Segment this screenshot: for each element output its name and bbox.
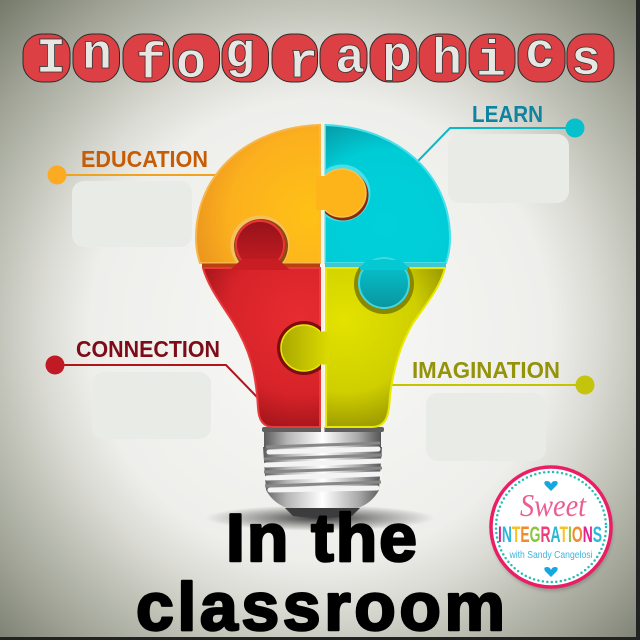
olive knob <box>281 325 329 371</box>
script word Sweet: Sweet <box>520 487 587 523</box>
bulb shadow <box>205 505 435 531</box>
olive knob socket <box>277 321 321 375</box>
puzzle piece: orange <box>196 125 320 268</box>
caption: In the classroom <box>136 500 505 640</box>
orange knob <box>316 169 366 217</box>
learn heading: LEARN <box>472 101 543 127</box>
imagination heading: IMAGINATION <box>412 357 560 383</box>
title: Infographics <box>23 26 614 94</box>
tagline: with Sandy Cangelosi <box>509 550 592 561</box>
title: Infographics: h <box>432 32 462 89</box>
icon: top heart <box>544 481 558 491</box>
title: Infographics: s <box>571 33 601 90</box>
title: Infographics: g <box>225 26 255 83</box>
connection heading: CONNECTION <box>76 336 220 362</box>
puzzle piece: teal <box>314 122 450 432</box>
education heading: EDUCATION <box>81 146 208 172</box>
title: Infographics: r <box>288 36 318 93</box>
screw base <box>262 427 384 518</box>
badge: Sweet Integrations <box>491 467 613 591</box>
title: Infographics: f <box>136 37 166 94</box>
light bulb <box>196 122 450 531</box>
word INTEGRATIONS: INTEGRATIONS <box>498 522 602 547</box>
title: Infographics: a <box>335 31 365 88</box>
panel: imagination <box>390 357 594 461</box>
puzzle piece: olive <box>326 254 445 427</box>
title: Infographics: i <box>476 34 506 91</box>
puzzle piece: red <box>203 216 331 427</box>
panel: learn <box>418 101 584 203</box>
title: Infographics: n <box>82 27 112 84</box>
icon: bottom heart <box>544 567 558 577</box>
title: Infographics: I <box>36 31 66 88</box>
panel: connection <box>46 336 257 439</box>
caption: In the classroom: In the <box>226 500 417 576</box>
title: Infographics: p <box>382 29 412 86</box>
title: Infographics: c <box>525 26 555 83</box>
title: Infographics: o <box>176 36 206 93</box>
panel: education <box>48 146 216 247</box>
